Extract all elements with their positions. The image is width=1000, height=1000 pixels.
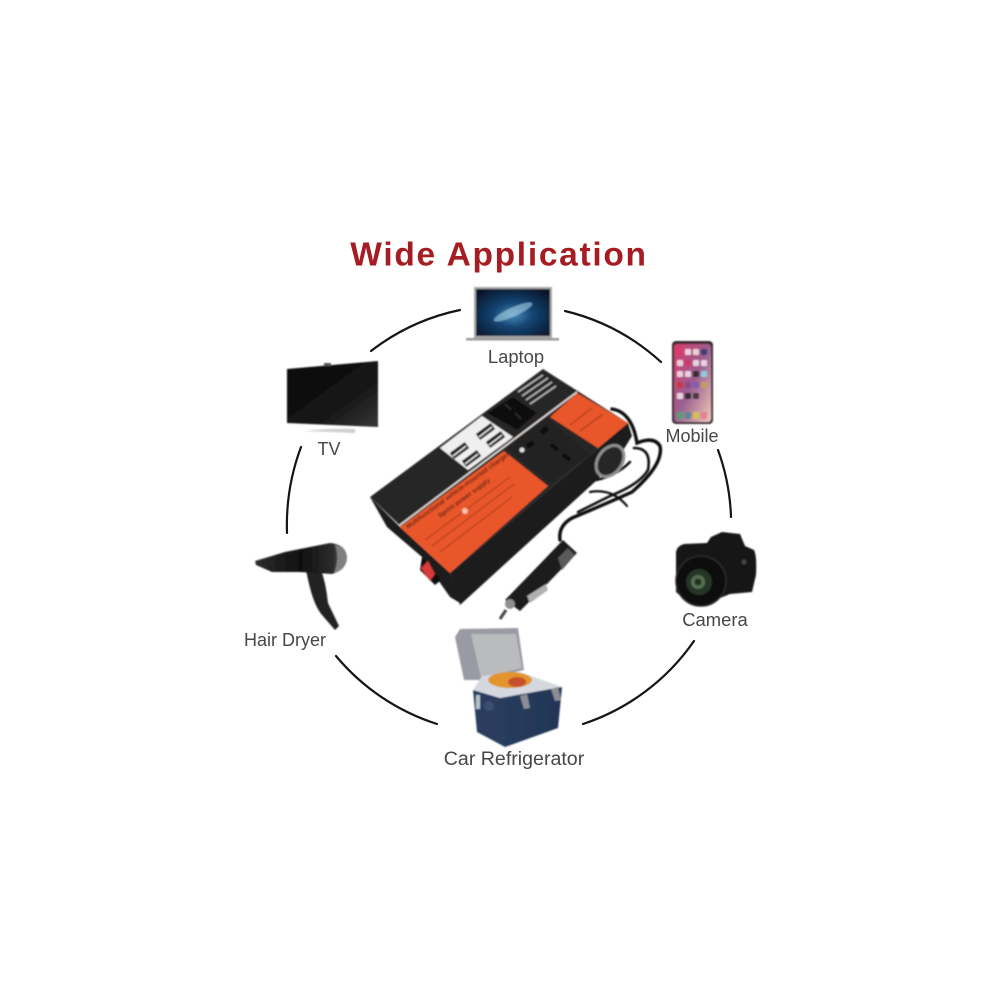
front side of inverter body: [450, 423, 632, 605]
label: laptop: Laptop: [488, 346, 544, 367]
US outlet: [487, 397, 537, 430]
label: mobile: Mobile: [665, 426, 719, 446]
red power switch: [420, 557, 441, 585]
USB port panel: [440, 416, 513, 470]
label: hair dryer: Hair Dryer: [244, 630, 326, 650]
separator line: [400, 392, 577, 525]
left end of inverter body: [370, 497, 460, 603]
large orange label: [400, 451, 548, 573]
circular connector arcs: [287, 310, 731, 724]
small orange label: [550, 393, 628, 448]
icon: car refrigerator: [455, 628, 562, 747]
icon: mobile phone: [672, 341, 713, 424]
label: TV: TV: [317, 439, 341, 459]
cigarette lighter plug: [500, 540, 577, 619]
large orange label: Multifunctional vehicle-mounted charger: [405, 451, 511, 531]
label: car refrigerator: Car Refrigerator: [444, 748, 585, 770]
icon: camera: [676, 532, 756, 606]
universal socket panel: [507, 418, 590, 483]
title: Wide Application: [350, 236, 648, 274]
top black face: [370, 369, 628, 573]
power inverter: [370, 369, 660, 619]
label: camera: Camera: [682, 609, 748, 630]
large orange label: Sprint power supply: [437, 477, 492, 520]
specification text block: [518, 375, 556, 404]
icon: hair dryer: [255, 543, 347, 630]
icon: television: [287, 361, 378, 433]
cable loops: [560, 409, 660, 540]
cigarette socket: [590, 440, 630, 482]
icon: laptop: [466, 287, 559, 340]
